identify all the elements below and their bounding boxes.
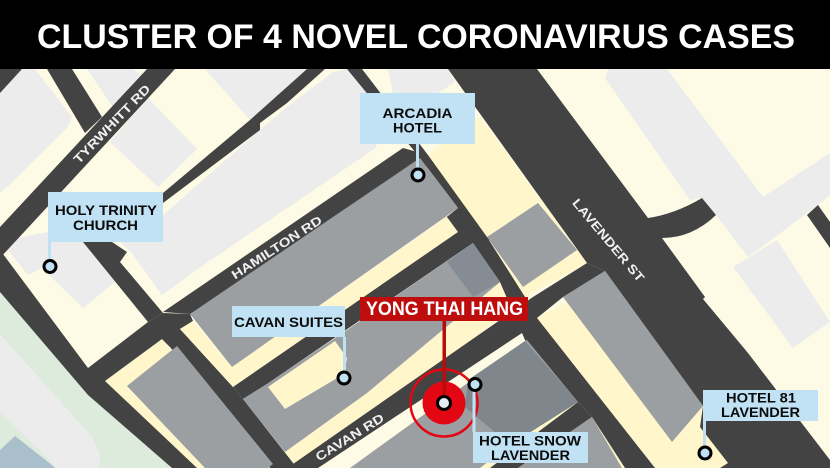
label: Yong Thai Hang: YONG THAI HANG [366, 299, 523, 320]
label: Hotel Snow Lavender: HOTEL SNOW [479, 432, 582, 448]
label: Holy Trinity Church: CHURCH [73, 217, 138, 233]
road label: Cavan Rd: CAVAN RD [313, 411, 387, 464]
label: Hotel 81 Lavender: HOTEL 81 [726, 390, 796, 406]
stub road [490, 402, 592, 468]
Hamilton Rd road [163, 148, 430, 314]
road label: Lavender St: LAVENDER ST [569, 196, 647, 285]
upper parallel road [233, 208, 490, 399]
yellow courtyard [268, 341, 347, 409]
northwest side road [47, 69, 102, 133]
label: Cavan Suites: CAVAN SUITES [234, 314, 343, 330]
label: Arcadia Hotel: ARCADIA [382, 105, 452, 121]
connecting road [88, 313, 193, 385]
label: Holy Trinity Church [44, 192, 163, 272]
label: Hotel 81 Lavender: LAVENDER [721, 404, 800, 420]
central road C [347, 69, 655, 468]
title banner [0, 0, 830, 69]
label: Arcadia Hotel: HOTEL [393, 120, 442, 136]
pale yellow block plots [105, 117, 728, 468]
road D lower [162, 329, 297, 468]
title banner: CLUSTER OF 4 NOVEL CORONAVIRUS CASES [37, 18, 795, 56]
road D upper [65, 195, 163, 322]
road label: Tyrwhitt Rd: TYRWHITT RD [71, 82, 153, 166]
park building [0, 436, 55, 468]
label: Hotel Snow Lavender [469, 378, 588, 463]
darker building: Hotel Snow Lavender [465, 341, 578, 445]
west diagonal road [0, 250, 197, 468]
park green area [0, 292, 172, 468]
yellow strip beside Hamilton block [180, 217, 458, 387]
label: Hotel Snow Lavender: LAVENDER [491, 447, 570, 463]
label: Holy Trinity Church: HOLY TRINITY [55, 202, 158, 218]
Lavender St road [448, 69, 830, 468]
Cavan Rd road [270, 263, 605, 468]
far right road [807, 205, 830, 248]
label: Hotel 81 Lavender [699, 390, 818, 459]
label: Arcadia Hotel [360, 93, 475, 181]
label: Cavan Suites [232, 306, 350, 384]
marker: Yong Thai Hang target [410, 321, 478, 436]
darker building: Yong Thai Hang block [447, 243, 500, 297]
road label: Hamilton Rd: HAMILTON RD [229, 213, 325, 282]
grey buildings [127, 158, 703, 468]
Tyrwhitt Rd road [0, 69, 175, 258]
minor road north [163, 69, 325, 203]
